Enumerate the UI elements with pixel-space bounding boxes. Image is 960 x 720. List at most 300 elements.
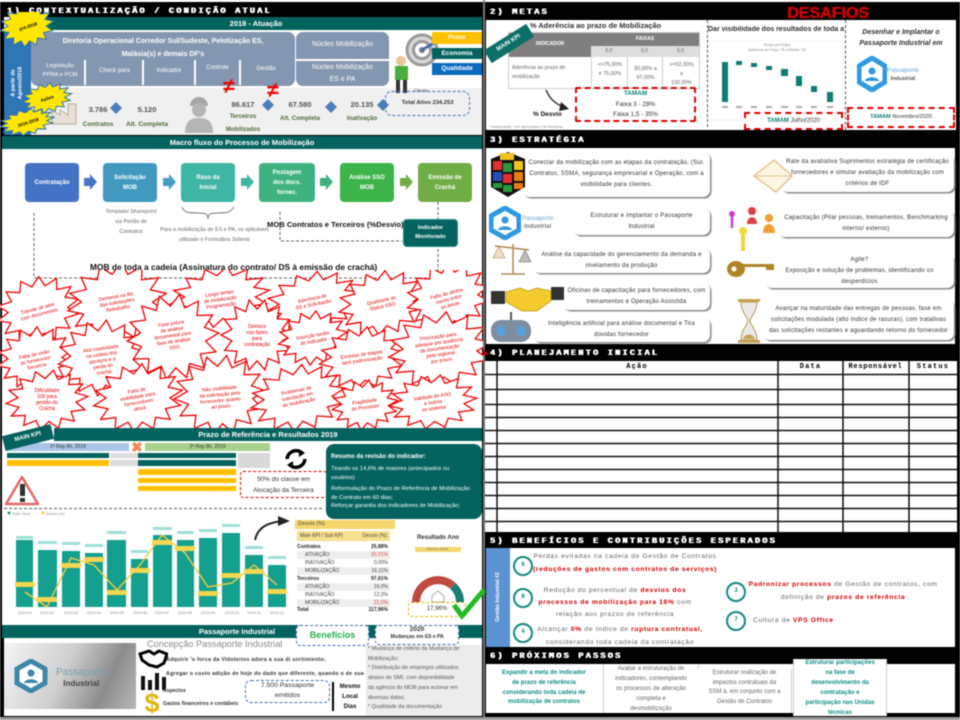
burst 12: Excesso de etapas (340, 349, 383, 361)
right item 3: Agile? (851, 257, 868, 263)
icon: rubik cube (490, 151, 526, 198)
logo hexagon (14, 658, 48, 694)
flow step 2: Solicitação (114, 174, 146, 180)
text: 16,11% (371, 568, 388, 574)
callout: target date 2: TAMAM Novembro/2020 (870, 114, 932, 120)
table row (512, 56, 694, 88)
benefit text: Padronizar processos de Gestão de contratos, com (748, 581, 937, 588)
text: 25,88% (371, 544, 388, 550)
nucleo mobilizacao: ES e PA (330, 76, 355, 82)
burst 12: sem padronização (342, 355, 383, 367)
left item 3: nivelamento da produção (586, 262, 657, 268)
burst 16: da solicitação pelo (199, 390, 241, 400)
benefit text: (reduções de gastos com contratos de serviços) (533, 566, 717, 573)
grey note: * Mudança de critério da Mudança de (368, 646, 459, 652)
text: Total (297, 607, 309, 613)
icon: scales (492, 243, 532, 276)
label: desvio: % Desvio (533, 111, 562, 118)
burst 15: visibilidade para (120, 391, 156, 403)
callout: total (385, 91, 470, 116)
text: 117,96% (369, 607, 388, 613)
number badge (513, 556, 533, 576)
vertical strip (486, 548, 510, 647)
logo text: Industrial (891, 76, 915, 82)
callout: resumo: de Contrato em 60 dias; (331, 494, 393, 500)
burst 7: Falta de visão (19, 349, 50, 361)
right item 3: desperdícios (841, 279, 878, 285)
text: ATIVAÇÃO (305, 584, 330, 590)
callout: 50%: 50% do classe em (257, 476, 310, 483)
callout: 50% (240, 471, 327, 498)
burst 1: com documentos (20, 307, 59, 323)
heading bar: prazo: Prazo de Referência e Resultados 2019 (198, 430, 338, 439)
icon: diamonds (110, 98, 390, 114)
table: desvio rows (296, 543, 390, 613)
callout: target date 1: TAMAM Julho/2020 (767, 118, 820, 124)
burst 10: nas fases (246, 330, 268, 336)
burst 7 (0, 321, 78, 395)
step 3: SSM à, em conjunto com a (708, 689, 781, 695)
burst 11 (274, 306, 352, 370)
icon: arrow (544, 89, 570, 112)
panel: beneficios (486, 548, 955, 647)
burst 8: Alta rotatividade (83, 344, 119, 355)
callout: total: Total Ativo 234.253 (402, 100, 453, 106)
heading: section 4: 4) PLANEJAMENTO INICIAL (490, 348, 659, 358)
table: planejamento (485, 361, 957, 532)
icon: people (726, 202, 781, 252)
table subheader: 5,0 (641, 48, 648, 54)
burst 8: crachá (96, 369, 112, 377)
left item 3 (533, 248, 710, 273)
benefit 3: Gastos financeiros e contábeis (163, 701, 238, 707)
benefit 3 (162, 688, 239, 707)
benefit text: relação aos prazos de referência (556, 611, 674, 618)
right item 1 (781, 155, 954, 192)
right item 1: fornecedores e simular avaliação da mobilização com (791, 170, 944, 176)
heading bar: macro fluxo (2, 136, 482, 149)
brace note (332, 682, 366, 711)
chart: monthly bars and line: 2019-04 (87, 611, 101, 615)
heading: section 1: 1) CONTEXTUALIZAÇÃO / CONDIÇÃO ATUAL (7, 6, 272, 16)
text: ATIVAÇÃO (305, 552, 330, 558)
stat: inativacao (346, 100, 378, 122)
heading: section 3: 3) ESTRATÉGIA (490, 135, 586, 145)
chart: monthly bars and line: 2019-09 (201, 611, 215, 615)
callout: indicador monitorado (403, 219, 458, 247)
concept title: Concepção Passaporte Industrial (147, 639, 282, 649)
tag: qualidade: Qualidade (441, 65, 473, 72)
note: para mobilizacao (160, 226, 270, 243)
chart: waterfall: Tempo por Etapa (764, 43, 790, 47)
vertical strip: Gestão Industrial #2 (495, 572, 501, 622)
step 3: Gestão de Contratos (717, 699, 772, 705)
burst 3 (166, 261, 274, 333)
burst 2: das solicitações (99, 297, 136, 309)
icon: not-equal signs (222, 75, 280, 102)
burst 14: Dificuldade (35, 388, 59, 394)
heading bar: passaporte: Passaporte Industrial (199, 627, 275, 636)
callout: 2020: Mudanças em ES e PA (390, 634, 444, 640)
left item 3: Análise da capacidade do gerenciamento da demanda e (541, 252, 702, 258)
diretoria block (31, 32, 295, 86)
text: 25,01% (371, 552, 388, 558)
left rows (6, 452, 110, 467)
burst 9: Fase prévia (158, 319, 185, 329)
heading: section 6: 6) PRÓXIMOS PASSOS (490, 651, 622, 661)
icon: burst yellow top: Ações (40, 94, 55, 103)
burst 5: Qualidade do (366, 295, 397, 307)
benefit text: Perdas evitadas na cadeia de Gestão de Contratos (534, 553, 716, 560)
burst 19: Validade do ASO (413, 391, 451, 403)
callout: 2020: 2020 (410, 626, 424, 633)
heading: section 5: 5) BENEFÍCIOS E CONTRIBUIÇÕES ESPERADOS (490, 536, 777, 546)
burst 10: Demora (248, 324, 266, 330)
label: mob cadeia: MOB de toda a cadeia (Assinatura do contrato/ DS à emissão de crachá) (90, 262, 377, 272)
right item 2 (778, 210, 954, 237)
panel: prazo de referencia (2, 428, 482, 625)
chart: monthly bars and line: Total Geral (12, 512, 31, 516)
icon: worker (184, 96, 214, 134)
note: para mobilizacao: Para a mobilização de ES e PA, os aplicáveis (160, 227, 269, 233)
burst 13: Priorização para (420, 332, 457, 343)
heading: section 2: 2) METAS (490, 7, 549, 17)
burst 18 (329, 376, 401, 434)
table head (297, 531, 390, 541)
burst 4: Aderência de (297, 293, 327, 305)
tag: main kpi metas: MAIN KPI (496, 33, 522, 53)
flow step 4: forneс. (277, 190, 297, 196)
right item 2: Capacitação (Pilar pessoas, treinamentos, Benchmarking (784, 214, 948, 220)
benefit 2: Agregar o custo adição de hoje do dado que diferente, quando o de sua (166, 671, 364, 677)
flow step 5 (340, 163, 394, 202)
vertical label: Agosto/2018 (18, 67, 24, 99)
burst 9 (124, 291, 222, 383)
burst 3: Longo tempo (205, 289, 234, 299)
target table (508, 32, 700, 89)
note: template: via Portão de (115, 219, 147, 225)
burst 15: alocá (134, 405, 147, 413)
icon: target and client (394, 33, 439, 94)
table row: e 75,00% (599, 71, 621, 77)
right item 2: interno/ externo) (842, 226, 890, 232)
panel: metas (486, 20, 956, 130)
step 2: os processos de alteração (616, 686, 686, 692)
note: para mobilizacao: utilizado o Formulário Sólenis (179, 237, 250, 243)
table head: Main KPI / Sub KPI (300, 533, 343, 539)
right phase header: 2ª Rep 8h. 2019 (189, 444, 226, 450)
right item 4: solicitações modulada (alto índice de rasuras), com tratativas (771, 316, 946, 322)
diretoria block: Controle (206, 65, 229, 71)
stat: adm completa: Alt. Completa (126, 121, 168, 128)
logo text small: Industrial (524, 224, 551, 230)
left item 1: Contratos, SSMA, segurança empresarial e Operação, com a (529, 171, 704, 177)
chart: monthly bars and line: 2019-07 (155, 611, 169, 615)
stat: adm completa (126, 105, 168, 128)
benefit 1: Adquirir 'o forca da Vidoterios adora a sua di sortimiento; (166, 657, 326, 663)
chart: monthly bars and line: 2019-02 (40, 611, 54, 615)
note: template: Contratos (119, 229, 143, 235)
flow step 5: Análise SSO (349, 174, 385, 180)
flow step 6: Crachá (435, 184, 455, 190)
burst 17: de mobilização (282, 396, 316, 409)
callout: beneficios: Benefícios (310, 630, 355, 640)
burst 17 (244, 357, 352, 439)
burst 19: no sistema (422, 404, 447, 414)
flow step 3 (181, 163, 235, 202)
panel: macro fluxo (2, 136, 482, 428)
burst 18: do Processo (351, 403, 380, 413)
burst 6: as áreas (440, 300, 461, 311)
left item 2 (573, 208, 710, 235)
burst 9: de análise (160, 325, 184, 335)
step 4: na fase de (825, 670, 855, 676)
burst 8: serviços e a (89, 356, 116, 366)
benefit 3: Aspectos (163, 688, 186, 694)
burst 17: solicitação em (282, 391, 314, 403)
stat: contratos: Contratos (83, 121, 113, 128)
callout: indicador monitorado: Indicador (418, 225, 443, 231)
label: mob contratos: MOB Contratos e Terceiros (%Desvio) (267, 220, 403, 229)
diretoria block: Malásia(s) e demais DF's (122, 51, 204, 58)
table subheader: 5,0 (677, 48, 684, 54)
burst 15 (88, 358, 188, 438)
callout: target bands: TAMAM (624, 90, 647, 97)
left item 1: Conectar da mobilização com as etapas da contratação, (Sur. (529, 160, 704, 166)
icon: handshake (138, 648, 169, 670)
step 4: participação nas Unidas (805, 700, 875, 706)
diretoria block: Legislação (46, 63, 74, 69)
lower grey band (31, 88, 482, 135)
burst 16: Não visibilidade (202, 385, 237, 394)
step 1: Expandir a meta do indicador (502, 670, 586, 676)
burst 6 (399, 254, 497, 340)
benefit text: Redução do percentual de desvios dos (544, 587, 686, 594)
brace note: Dias (344, 704, 356, 710)
burst 17: Problemas de (281, 385, 312, 397)
icon: not-equal signs: ≠ (267, 79, 279, 102)
callout: resumo: Reformulação do Prazo de Referência de Mobilização (331, 486, 470, 492)
table row: >=62,00% (669, 62, 694, 68)
table band header: FAIXAS (636, 36, 654, 42)
text: MOBILIZAÇÃO (305, 600, 339, 606)
stat: inativacao: 20.135 (351, 100, 373, 109)
right item 1: Rate da avaliativa Suprimentos estratégia de certificação (786, 159, 949, 165)
burst 9: documental para (154, 330, 192, 342)
icon: orange cross: ✖ (131, 439, 143, 455)
panel: 2018 actuation (4, 17, 482, 135)
callout: resumo: Resumo da revisão do indicador: (331, 454, 426, 460)
number badge: 3 (734, 588, 738, 594)
step 4: desenvolvimento da (811, 680, 869, 686)
table header: INDICADOR (536, 41, 564, 47)
number badge: 7 (734, 617, 738, 623)
logo text: Passaporte (56, 667, 107, 678)
icon: check (452, 588, 486, 620)
text: 0,00% (374, 560, 388, 566)
chart: monthly bars and line: 2019-06 (133, 611, 147, 615)
icon: burst yellow top: pré-2018 (19, 21, 38, 32)
callout: resumo (326, 444, 482, 519)
heading bar: 2018: 2018 - Atuação (230, 19, 282, 28)
text: INATIVAÇÃO (305, 560, 335, 566)
left item 2: Industrial (628, 224, 655, 230)
step 1: de prazo de referência (512, 680, 576, 686)
note: template (105, 208, 157, 235)
burst 16: ao prazo (211, 403, 231, 411)
icon: chart (140, 672, 167, 691)
logo text: Industrial (63, 679, 99, 688)
table title: Desvio (%) (298, 521, 325, 527)
burst 2: Retrabalho (106, 304, 131, 314)
text: 16,0% (374, 584, 388, 590)
flow arrows (32, 174, 440, 280)
chart: monthly bars and line: 2019-08 (178, 611, 192, 615)
right item 4: Avançar na maturidade das entregas de pessoas, fase em (775, 306, 942, 312)
stat: adm completa: 5.120 (138, 105, 156, 114)
burst 1: Trâmite de atos (20, 302, 55, 316)
table band header (591, 33, 699, 46)
panel: proximos passos (486, 664, 955, 713)
benefit text: Cultura de VPS Office (753, 617, 834, 624)
gauge value (408, 602, 466, 617)
number badge (513, 588, 533, 608)
stat: terceiros: Mobilizados (226, 127, 260, 133)
right yellow rows (137, 468, 237, 492)
icon: factory (51, 103, 77, 125)
benefit text: Alcançar 0% de índice de ruptura contratual, (537, 626, 703, 633)
burst 7: do fornecedor (20, 355, 52, 367)
burst 10: contratação (244, 342, 270, 348)
burst 4: SS e Solicitação (295, 298, 332, 312)
table row: 100,00% (671, 80, 692, 86)
table subheader (591, 46, 699, 57)
logo: passaporte (856, 55, 888, 93)
burst 19: e outros (424, 399, 443, 407)
callout: passaportes (245, 680, 330, 703)
benefit text: definição de prazos de referência (781, 594, 905, 601)
chart: monthly bars and line: Desvio (%) (46, 512, 65, 516)
table subheader: 5,0 (606, 48, 612, 54)
heading bar: passaporte (2, 625, 482, 638)
gauge title: Resultado Ano (417, 535, 459, 541)
icon: handshake gold (490, 282, 564, 314)
step 4: técnicas (828, 710, 852, 716)
burst 3: Programação (206, 301, 237, 311)
burst 9: SSO (169, 344, 180, 352)
callout: resumo: usuários) (331, 474, 355, 480)
icon: warning (4, 475, 40, 506)
text: Contratos (297, 544, 321, 550)
text: MOBILIZAÇÃO (305, 568, 339, 574)
step 2: desmobilização (630, 706, 672, 712)
text: INATIVAÇÃO (305, 592, 335, 598)
burst 13: por prazo (431, 356, 453, 365)
step 4 (793, 659, 887, 716)
heading bar: 2018 (30, 17, 482, 30)
right item 1: critérios de IDF (846, 181, 889, 187)
panel: passaporte industrial (4, 625, 482, 716)
tag: main kpi metas (484, 24, 534, 63)
nucleo mobilizacao: Núcleo Mobilização (312, 41, 373, 48)
flow step 4: dos docs. (273, 180, 301, 186)
burst 8: perda do (93, 363, 114, 371)
benefit text: considerando toda cadeia da contratação (546, 639, 694, 646)
tag: main kpi (2, 424, 54, 451)
dashed dividers (707, 20, 708, 127)
number badge: 8 (521, 594, 525, 600)
diretoria block: Indicador (157, 68, 181, 74)
metric title: % Aderência ao prazo de Mobilização (530, 21, 661, 30)
left phase header (7, 443, 129, 451)
stat: terceiros (226, 100, 261, 133)
chart: monthly bars and line: 2019-11 (247, 611, 261, 615)
burst 13: adequar por ausência (415, 337, 464, 349)
burst 15: fornecedores (124, 397, 154, 408)
left item 1: visibilidade para clientes. (580, 182, 653, 188)
nucleo mobilizacao: Núcleo Mobilização (312, 64, 373, 70)
flow step 4: Postagem (273, 170, 301, 176)
callout: passaportes: 7.500 Passaporte (261, 682, 314, 689)
icon: refresh arrows (284, 448, 308, 470)
burst 12 (315, 322, 409, 394)
callout: 50%: Alocação da Terceira (253, 487, 314, 494)
table row: 80,00% a (634, 66, 657, 72)
column header: status: Status (917, 363, 949, 371)
icon: envelope (752, 158, 794, 194)
gauge arc (411, 575, 465, 603)
gauge subtitle: Desvio acum. (426, 547, 450, 551)
burst 14 (4, 367, 90, 433)
benefit text (525, 585, 705, 620)
table title (295, 520, 395, 529)
icon: burst yellow top (0, 11, 74, 136)
left item 5: Inteligência artificial para análise documental e Tira (548, 321, 695, 327)
burst 13: pela regional (426, 350, 455, 360)
step 2: indicadores, contemplando (615, 676, 687, 682)
tag: economia (432, 48, 482, 59)
chart: monthly bars and line: 2019-10 (225, 611, 239, 615)
callout: 2020 (375, 625, 459, 645)
burst 4 (260, 264, 366, 340)
heading bar: prazo (54, 428, 482, 441)
table row: 97,00% (637, 75, 654, 81)
grey note: abaixo do SMI, com disponibilidade (368, 675, 455, 681)
burst 5: Status SSO (369, 301, 396, 313)
callout: target date 1 (744, 112, 843, 130)
logo text (886, 66, 920, 82)
burst 1 (0, 268, 87, 352)
step 2 (603, 664, 699, 713)
flow step 1 (25, 163, 79, 202)
left item 1 (523, 152, 710, 197)
burst 16 (171, 352, 269, 438)
chart: monthly bars and line: 2019-05 (110, 611, 124, 615)
vertical label (4, 30, 31, 135)
flow step 4 (259, 163, 315, 202)
stat: contratos: 3.786 (89, 105, 107, 114)
vertical label: A partir de (10, 69, 16, 97)
number badge (726, 582, 746, 602)
brace note: Mesmo (340, 684, 360, 690)
step 1: considerando toda cadeia de (503, 690, 585, 696)
flow step 6 (418, 163, 472, 202)
burst 11: do indicador (300, 337, 328, 347)
step 4: contratação e (820, 690, 860, 696)
stat: adm completa 2 (280, 100, 320, 122)
column header: responsavel: Responsável (849, 363, 902, 371)
note: template: Template/ Sharepoint (106, 209, 156, 215)
